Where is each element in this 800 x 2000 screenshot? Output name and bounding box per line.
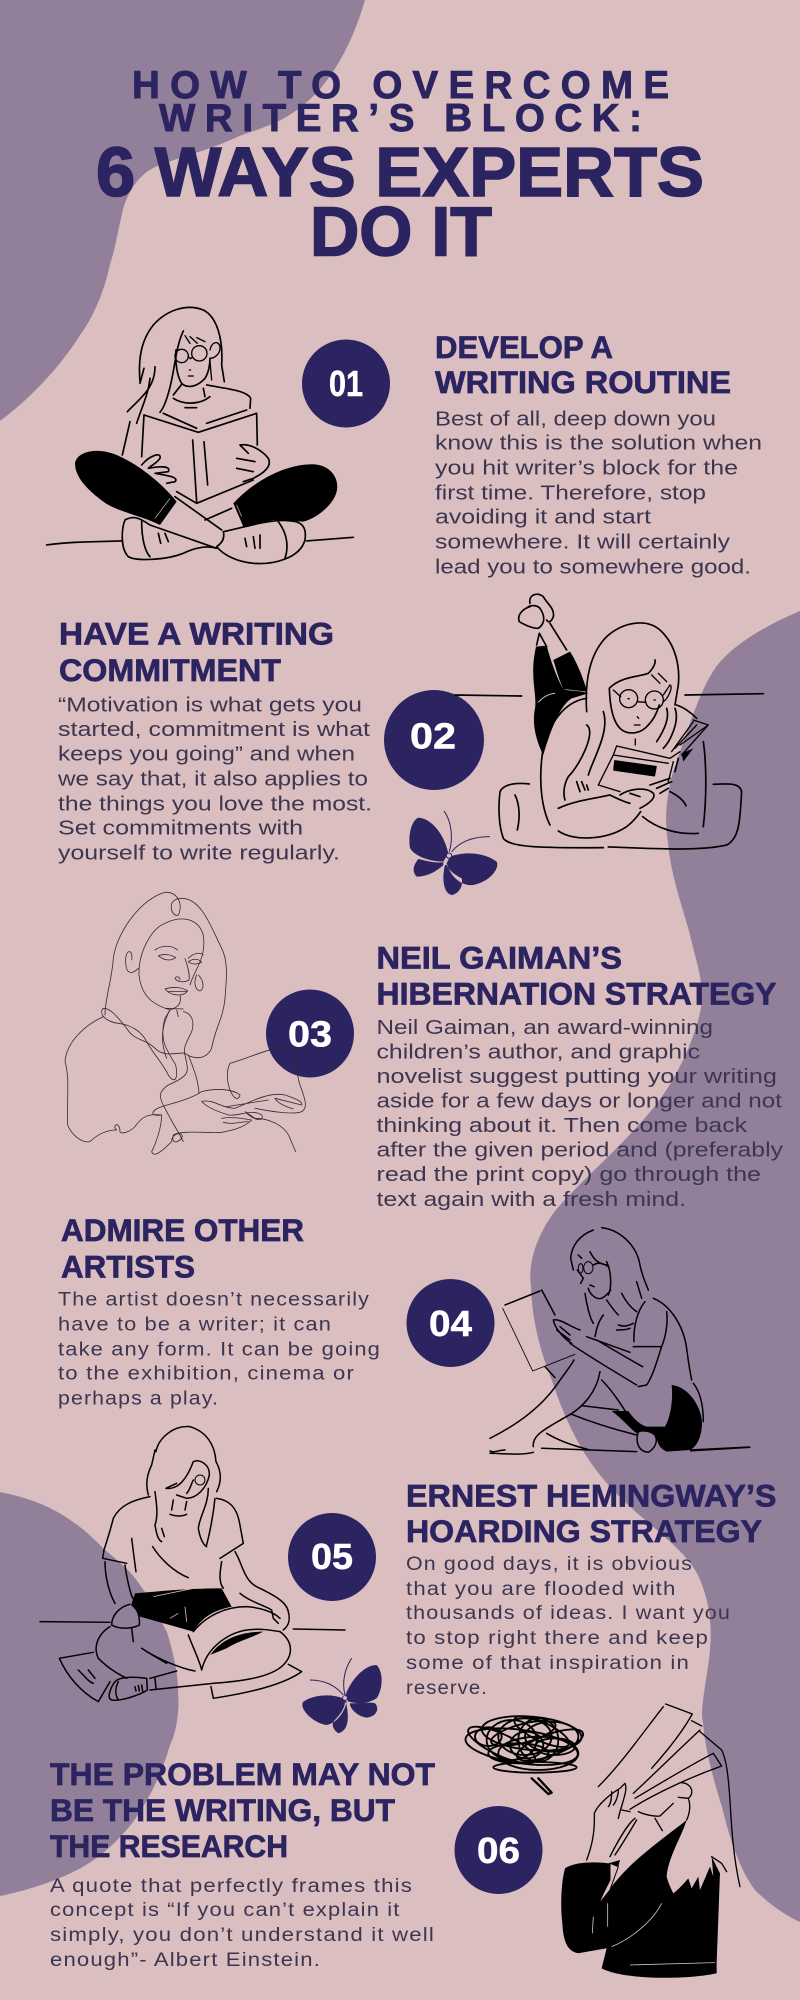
illustration: woman seated holding a page [490,1228,751,1454]
body text [58,1290,381,1410]
title: DO IT [310,193,492,271]
body text: enough”- Albert Einstein. [50,1950,321,1971]
heading: have a writing commitment [59,616,334,688]
body text: read the print copy) go through the [376,1164,761,1186]
panel: step 3 neil gaiman's hibernation strategy [65,892,783,1211]
body text: started, commitment is what [58,719,371,741]
body text: thousands of ideas. I want you [406,1603,731,1624]
body text: first time. Therefore, stop [435,482,706,504]
heading: admire other artists: ADMIRE OTHER [61,1212,304,1248]
heading: admire other artists [61,1212,304,1284]
body text: text again with a fresh mind. [376,1189,686,1211]
body text: yourself to write regularly. [58,843,340,865]
heading: develop a writing routine: DEVELOP A [435,329,613,365]
number badge 01: 01 [329,363,363,404]
body text: to stop right there and keep [406,1628,709,1649]
number badge 03 [266,990,354,1078]
title: WRITER’S BLOCK: [159,97,642,140]
blob: right side [530,611,800,1922]
number badge 05: 05 [311,1536,353,1577]
body text: the things you love the most. [58,794,372,816]
heading: the problem may not be the writing, but the research [50,1756,435,1864]
number badge 05 [288,1513,376,1601]
heading: develop a writing routine: WRITING ROUTINE [435,364,731,400]
number badge 01 [302,340,390,428]
heading: admire other artists: ARTISTS [61,1248,195,1284]
body text: we say that, it also applies to [57,768,368,790]
body text: On good days, it is obvious [406,1554,693,1575]
body text: A quote that perfectly frames this [50,1876,413,1897]
heading: ernest hemingway's hoarding strategy [406,1478,776,1549]
icon: scribble [463,1711,587,1794]
illustration: woman reading cross-legged [47,307,353,564]
number badge 06: 06 [477,1830,520,1871]
heading: have a writing commitment: HAVE A WRITING [59,616,334,652]
body text: after the given period and (preferably [376,1140,783,1162]
number badge 04: 04 [429,1303,472,1344]
panel: step 4 admire other artists [58,1212,751,1454]
body text: have to be a writer; it can [58,1315,332,1336]
body text: some of that inspiration in [406,1653,690,1674]
body text [435,409,762,578]
blob: top left [0,0,365,421]
panel: step 2 have a writing commitment [57,594,763,895]
illustration: single-line drawing of a woman [65,892,305,1154]
body text [406,1554,731,1699]
body text: Set commitments with [58,817,303,839]
body text [57,694,372,865]
body text: to the exhibition, cinema or [58,1364,355,1385]
body text: know this is the solution when [435,432,762,454]
panel: step 1 develop a writing routine [47,307,762,578]
body text: thinking about it. Then come back [376,1115,748,1137]
number badge 04 [406,1279,494,1367]
body text: novelist suggest putting your writing [376,1066,777,1088]
body text: lead you to somewhere good. [435,556,751,578]
heading: have a writing commitment: COMMITMENT [59,652,281,688]
body text: “Motivation is what gets you [58,694,362,716]
body text: concept is “If you can’t explain it [50,1900,400,1921]
body text: keeps you going” and when [58,743,355,765]
illustration: woman holding papers with scribble [463,1704,740,1978]
body text: Best of all, deep down you [435,409,716,431]
title: HOW TO OVERCOME [132,64,669,107]
panel: step 6 the problem may not be the writing [50,1704,740,1978]
heading: develop a writing routine [435,329,731,400]
title [96,64,704,271]
number badge 02: 02 [410,716,456,757]
body text: that you are flooded with [406,1579,676,1600]
body text: perhaps a play. [58,1389,219,1410]
body text: avoiding it and start [435,506,652,528]
icon: butterfly [409,811,497,895]
heading: ernest hemingway's hoarding strategy: HOARDING STRATEGY [406,1513,762,1549]
body text: you hit writer’s block for the [435,458,738,480]
body text: The artist doesn’t necessarily [58,1290,370,1311]
title: 6 WAYS EXPERTS [96,133,704,211]
body text: take any form. It can be going [58,1340,381,1361]
body text: Neil Gaiman, an award-winning [376,1017,713,1039]
body text [376,1017,783,1211]
number badge 02 [384,690,484,790]
illustration: woman reading on the floor [40,1427,382,1733]
heading: the problem may not be the writing, but the research: BE THE WRITING, BUT [50,1792,395,1828]
heading: neil gaiman's hibernation strategy [376,940,776,1012]
heading: the problem may not be the writing, but the research: THE RESEARCH [50,1828,288,1864]
heading: the problem may not be the writing, but the research: THE PROBLEM MAY NOT [50,1756,435,1792]
body text: aside for a few days or longer and not [376,1090,783,1112]
panel: step 5 ernest hemingway's hoarding strategy [40,1427,776,1733]
body text [50,1876,435,1971]
number badge 06 [454,1806,542,1894]
number badge 03: 03 [288,1014,332,1054]
body text: somewhere. It will certainly [435,531,730,553]
illustration: woman lying on pillow reading [409,594,763,895]
body text: simply, you don’t understand it well [50,1925,435,1946]
heading: neil gaiman's hibernation strategy: NEIL GAIMAN’S [376,940,622,976]
icon: butterfly [302,1658,382,1733]
body text: reserve. [406,1678,488,1699]
heading: ernest hemingway's hoarding strategy: ERNEST HEMINGWAY’S [406,1478,776,1514]
blob: bottom left [0,1492,178,1896]
body text: children’s author, and graphic [376,1041,700,1063]
heading: neil gaiman's hibernation strategy: HIBERNATION STRATEGY [376,976,776,1012]
